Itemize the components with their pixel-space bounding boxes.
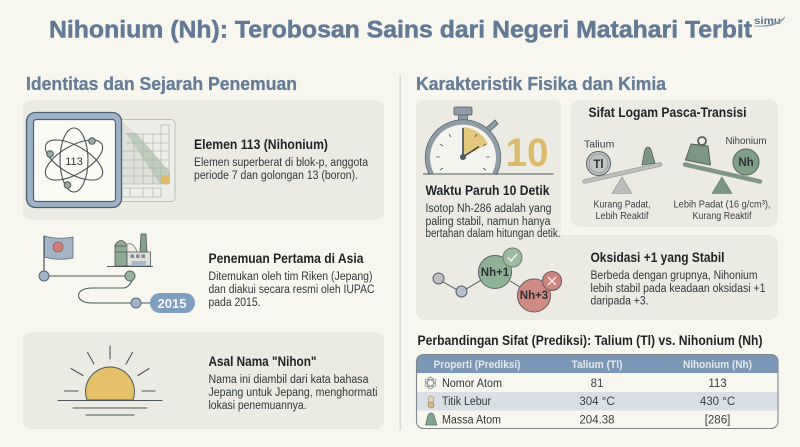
table header: Nihonium (Nh) <box>683 359 752 371</box>
icon: scale nihonium: Kurang Reaktif <box>692 210 752 222</box>
row: massa atom: 204.38 <box>579 414 615 426</box>
icon: scale nihonium <box>674 135 770 222</box>
icon: scale talium: Lebih Reaktif <box>596 210 649 222</box>
text: waktu paruh: Waktu Paruh 10 Detik <box>426 183 550 198</box>
panel: asal nama <box>23 332 384 429</box>
icon: periodic table <box>118 120 175 202</box>
heading: tabel perbandingan: Perbandingan Sifat (Prediksi): Talium (Tl) vs. Nihonium (Nh) <box>418 333 762 348</box>
text: penemuan: Penemuan Pertama di Asia <box>208 251 364 266</box>
text: asal nama: lokasi penemuannya. <box>208 400 306 412</box>
big number 10: 10 <box>506 131 548 175</box>
text: waktu paruh: Isotop Nh-286 adalah yang <box>426 203 552 215</box>
text: waktu paruh: bertahan dalam hitungan detik. <box>426 228 560 240</box>
heading: sifat logam: Sifat Logam Pasca-Transisi <box>588 105 746 120</box>
icon: scale nihonium: Nihonium <box>726 135 767 147</box>
table header <box>416 354 778 373</box>
table header: Talium (Tl) <box>572 359 623 371</box>
row: titik lebur: 304 °C <box>579 396 615 408</box>
panel: waktu paruh <box>416 100 561 241</box>
text: oksidasi <box>590 250 766 308</box>
heading: identitas: Identitas dan Sejarah Penemuan <box>26 74 297 94</box>
text: oksidasi: Oksidasi +1 yang Stabil <box>590 250 724 265</box>
row: massa atom: [286] <box>705 414 730 426</box>
logo: simu: simu <box>754 16 781 27</box>
title: Nihonium (Nh): Terobosan Sains dari Negeri Matahari Terbit <box>49 16 752 44</box>
icon: laboratory <box>107 234 153 266</box>
icon: stopwatch <box>423 107 554 174</box>
icon: scale talium <box>584 138 660 222</box>
text: elemen 113: Elemen superberat di blok-p, anggota <box>194 157 369 169</box>
text: penemuan: dan diakui secara resmi oleh IUPAC <box>208 284 374 296</box>
icon: scale nihonium: Lebih Padat (16 g/cm³), <box>674 198 770 210</box>
row: nomor atom: Nomor Atom <box>442 378 502 390</box>
icon: scale nihonium: Nh <box>738 157 754 169</box>
row: massa atom: Massa Atom <box>442 414 501 426</box>
table: perbandingan <box>416 354 778 428</box>
text: elemen 113: periode 7 dan golongan 13 (boron). <box>194 170 358 182</box>
text: oksidasi: daripada +3. <box>590 296 648 308</box>
row: titik lebur: 430 °C <box>700 396 735 408</box>
text: asal nama: Nama ini diambil dari kata bahasa <box>208 374 369 386</box>
panel: elemen 113 <box>23 100 384 220</box>
text: oksidasi: lebih stabil pada keadaan oksidasi +1 <box>590 283 766 295</box>
icon: atom tile: 113 <box>65 156 83 168</box>
icon: scale talium: Tl <box>593 159 604 171</box>
text: elemen 113: Elemen 113 (Nihonium) <box>194 137 328 152</box>
icon: oxidation molecule <box>433 248 562 312</box>
icon: scale talium: Kurang Padat, <box>594 198 650 210</box>
panel: oksidasi <box>416 235 778 320</box>
text: waktu paruh: paling stabil, namun hanya <box>426 216 551 228</box>
text: asal nama: Asal Nama "Nihon" <box>208 354 316 369</box>
text: penemuan: pada 2015. <box>208 297 260 309</box>
icon: rising sun <box>58 346 162 415</box>
heading: karakteristik: Karakteristik Fisika dan Kimia <box>416 74 667 94</box>
icon: oxidation molecule: Nh+1 <box>481 267 510 279</box>
text: waktu paruh <box>426 183 560 240</box>
icon: oxidation molecule: Nh+3 <box>520 290 548 302</box>
text: penemuan <box>208 251 374 309</box>
text: oksidasi: Berbeda dengan grupnya, Nihonium <box>590 270 758 282</box>
panel: penemuan <box>39 234 374 313</box>
row: nomor atom: 113 <box>708 378 727 390</box>
text: elemen 113 <box>194 137 369 182</box>
text: asal nama: Jepang untuk Jepang, menghormati <box>208 387 378 399</box>
text: asal nama <box>208 354 378 412</box>
icon: scale talium: Talium <box>584 138 615 150</box>
text: penemuan: Ditemukan oleh tim Riken (Jepang) <box>208 271 373 283</box>
icon: discovery timeline: 2015 <box>158 296 186 311</box>
icon: atom tile <box>26 112 122 208</box>
icon: discovery timeline <box>39 234 195 313</box>
row: titik lebur: Titik Lebur <box>442 396 491 408</box>
row: nomor atom: 81 <box>591 378 603 390</box>
row: titik lebur <box>417 392 778 410</box>
table header: Properti (Prediksi) <box>434 359 521 371</box>
panel: sifat logam <box>571 100 778 227</box>
row: nomor atom <box>424 377 727 390</box>
row: massa atom <box>426 413 730 426</box>
